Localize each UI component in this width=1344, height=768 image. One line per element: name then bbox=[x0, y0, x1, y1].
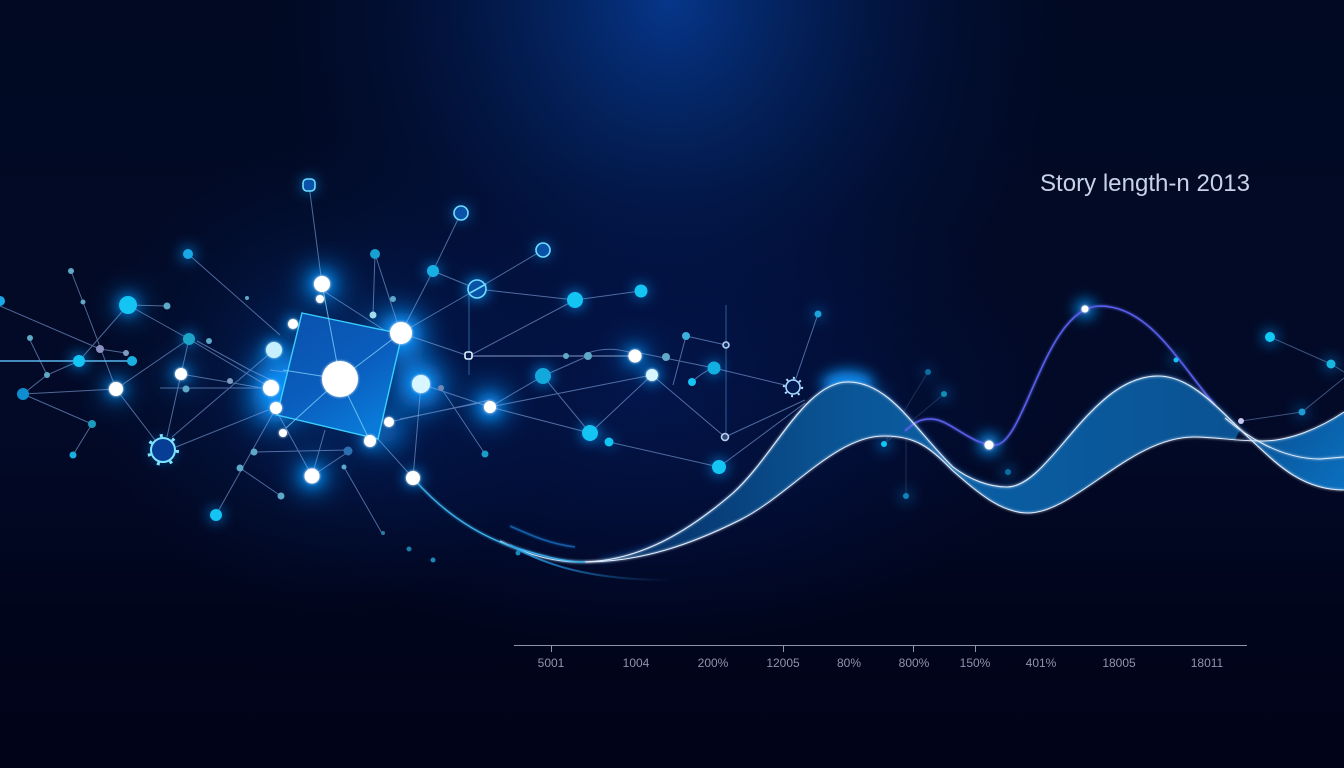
network halo glows bbox=[72, 179, 1336, 521]
wave band right fill bbox=[1248, 412, 1344, 490]
small dim nodes bbox=[27, 268, 1244, 562]
spiked ring node left bbox=[148, 436, 178, 464]
blue swooshes bbox=[510, 526, 670, 580]
axis labels: 800% bbox=[899, 656, 930, 670]
network connection lines bbox=[0, 185, 1344, 535]
axis labels: 200% bbox=[698, 656, 729, 670]
axis labels: 80% bbox=[837, 656, 861, 670]
axis labels: 401% bbox=[1026, 656, 1057, 670]
axis labels: 12005 bbox=[766, 656, 800, 670]
spiked ring node right bbox=[784, 378, 802, 396]
lower wave line bbox=[585, 412, 1344, 562]
axis labels: 5001 bbox=[538, 656, 565, 670]
axis labels bbox=[538, 656, 1224, 670]
white bright nodes bbox=[109, 276, 1088, 485]
axis labels: 18011 bbox=[1191, 656, 1224, 670]
wave peak halo bbox=[600, 376, 1248, 560]
middle right wave line bbox=[1225, 418, 1344, 459]
network nodes bbox=[0, 179, 1336, 562]
blue tail lines bbox=[413, 478, 585, 562]
ring nodes bbox=[303, 179, 729, 440]
chart title: Story length-n 2013 bbox=[1040, 170, 1250, 197]
wave band fill bbox=[580, 376, 1240, 562]
axis labels: 150% bbox=[960, 656, 991, 670]
central glowing square bbox=[277, 284, 402, 441]
axis line and ticks bbox=[514, 645, 1247, 652]
axis labels: 1004 bbox=[623, 656, 650, 670]
wave chart band bbox=[413, 306, 1344, 562]
x axis bbox=[514, 645, 1247, 670]
axis labels: 18005 bbox=[1102, 656, 1136, 670]
purple trend line bbox=[905, 306, 1215, 445]
white wave lines bbox=[500, 376, 1344, 562]
cyan nodes bbox=[0, 249, 1336, 521]
